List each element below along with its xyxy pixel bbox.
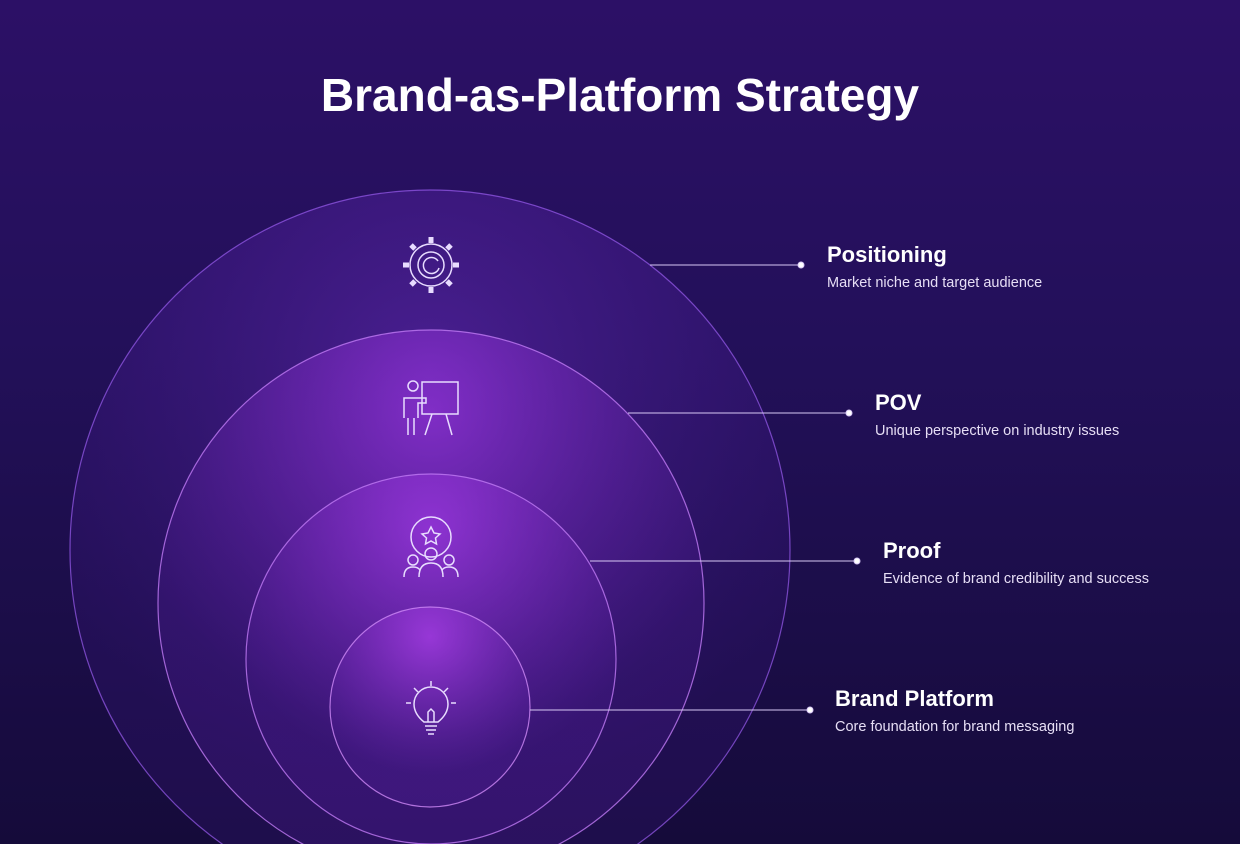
label: positioning: Market niche and target audience <box>827 275 1042 291</box>
label: positioning <box>827 242 1042 291</box>
label: POV: Unique perspective on industry issues <box>875 423 1119 439</box>
label: POV: POV <box>875 390 921 415</box>
label: brand platform: Core foundation for brand messaging <box>835 719 1074 735</box>
icon: people with star <box>404 517 458 577</box>
circle: positioning <box>70 190 790 844</box>
icon: lightbulb <box>406 681 456 734</box>
icon: presenter <box>404 381 458 435</box>
label: POV <box>875 390 1119 439</box>
circle: POV <box>158 330 704 844</box>
label: brand platform: Brand Platform <box>835 686 994 711</box>
title: Brand-as-Platform Strategy <box>321 69 919 121</box>
connector lines <box>530 262 860 713</box>
circle: proof <box>246 474 616 844</box>
label: brand platform <box>835 686 1074 735</box>
circle: brand platform <box>330 607 530 807</box>
label: proof: Evidence of brand credibility and success <box>883 571 1149 587</box>
icon: gear <box>403 237 459 293</box>
label: proof: Proof <box>883 538 940 563</box>
label: positioning: Positioning <box>827 242 947 267</box>
label: proof <box>883 538 1149 587</box>
